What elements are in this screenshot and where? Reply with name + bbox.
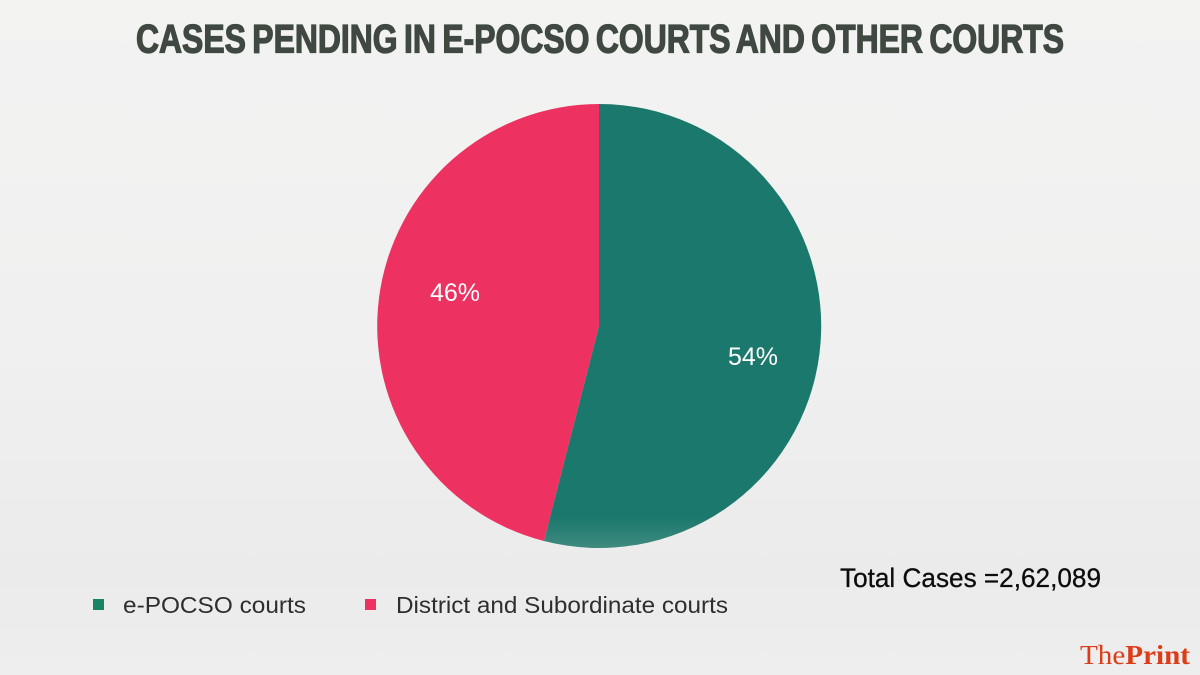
slice: e-POCSO courts 54% [544,104,821,548]
legend swatch: District and Subordinate courts [365,599,376,610]
slice: District and Subordinate courts 46% [377,104,599,541]
legend [93,592,728,618]
legend label: District and Subordinate courts: District and Subordinate courts [396,592,728,618]
total cases: Total Cases =2,62,089 [840,563,1101,593]
logo: ThePrint: ThePrint [1080,640,1190,670]
pie chart [377,104,821,548]
label: 46%: 46% [430,279,480,307]
legend swatch: e-POCSO courts [93,599,104,610]
label: 54%: 54% [728,343,778,371]
legend label: e-POCSO courts: e-POCSO courts [123,592,306,618]
